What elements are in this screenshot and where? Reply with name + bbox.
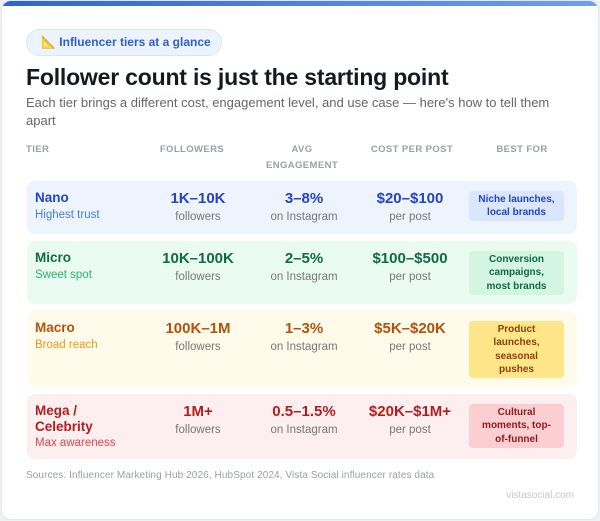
row: mega: Celebrity [35,419,93,434]
row: micro: $100–$500 [372,250,448,267]
row: mega: Max awareness [35,437,116,449]
table header: ENGAGEMENT [266,160,338,171]
row: micro: Sweet spot [35,269,92,281]
row: mega: 0.5–1.5% [272,403,336,420]
row: micro [27,241,577,304]
row: mega: Mega / [35,403,77,418]
row: macro: $5K–$20K [374,320,446,337]
table header: FOLLOWERS [160,144,224,155]
row: nano: Niche launches, local brands [478,194,555,218]
row: macro: on Instagram [270,341,338,353]
table header: BEST FOR [496,144,548,155]
row: micro: 2–5% [285,250,323,267]
row: nano: followers [175,211,221,223]
row: macro: Broad reach [35,339,98,351]
table header: TIER [26,144,49,155]
brand: vistasocial.com [506,490,574,501]
sources: Sources: Influencer Marketing Hub 2026, HubSpot 2024, Vista Social influencer rates data [26,470,434,481]
row: mega: Cultural moments, top-of-funnel [482,407,551,445]
row: macro: 1–3% [285,320,323,337]
title: Follower count is just the starting point [26,64,448,90]
row: macro: 100K–1M [165,320,231,337]
row: mega: 1M+ [183,403,213,420]
row: micro: Micro [35,250,71,265]
row: nano: Highest trust [35,209,100,221]
row: macro: per post [389,341,431,353]
row: micro: Conversion campaigns, most brands [486,254,546,292]
row: micro: 10K–100K [162,250,234,267]
subtitle: Each tier brings a different cost, engagement level, and use case — here's how to tell them apart [26,95,549,128]
row: micro: per post [389,271,431,283]
table header [26,144,548,171]
row: nano: Nano [35,190,69,205]
badge: 📐 Influencer tiers at a glance [41,35,211,49]
row: macro: Macro [35,320,75,335]
row: micro: on Instagram [270,271,338,283]
badge [26,29,222,56]
row: mega [27,394,577,459]
row: mega: on Instagram [270,424,338,436]
row: macro: followers [175,341,221,353]
row: macro [27,311,577,387]
table header: AVG [291,144,313,155]
row: macro: Product launches, seasonal pushes [493,324,540,375]
row: nano: 1K–10K [170,190,226,207]
row: mega: per post [389,424,431,436]
row: nano [27,181,577,234]
row: nano: 3–8% [285,190,323,207]
row: nano: per post [389,211,431,223]
row: micro: followers [175,271,221,283]
row: nano: on Instagram [270,211,338,223]
row: nano: $20–$100 [377,190,443,207]
row: mega: followers [175,424,221,436]
table header: COST PER POST [371,144,453,155]
row: mega: $20K–$1M+ [369,403,451,420]
